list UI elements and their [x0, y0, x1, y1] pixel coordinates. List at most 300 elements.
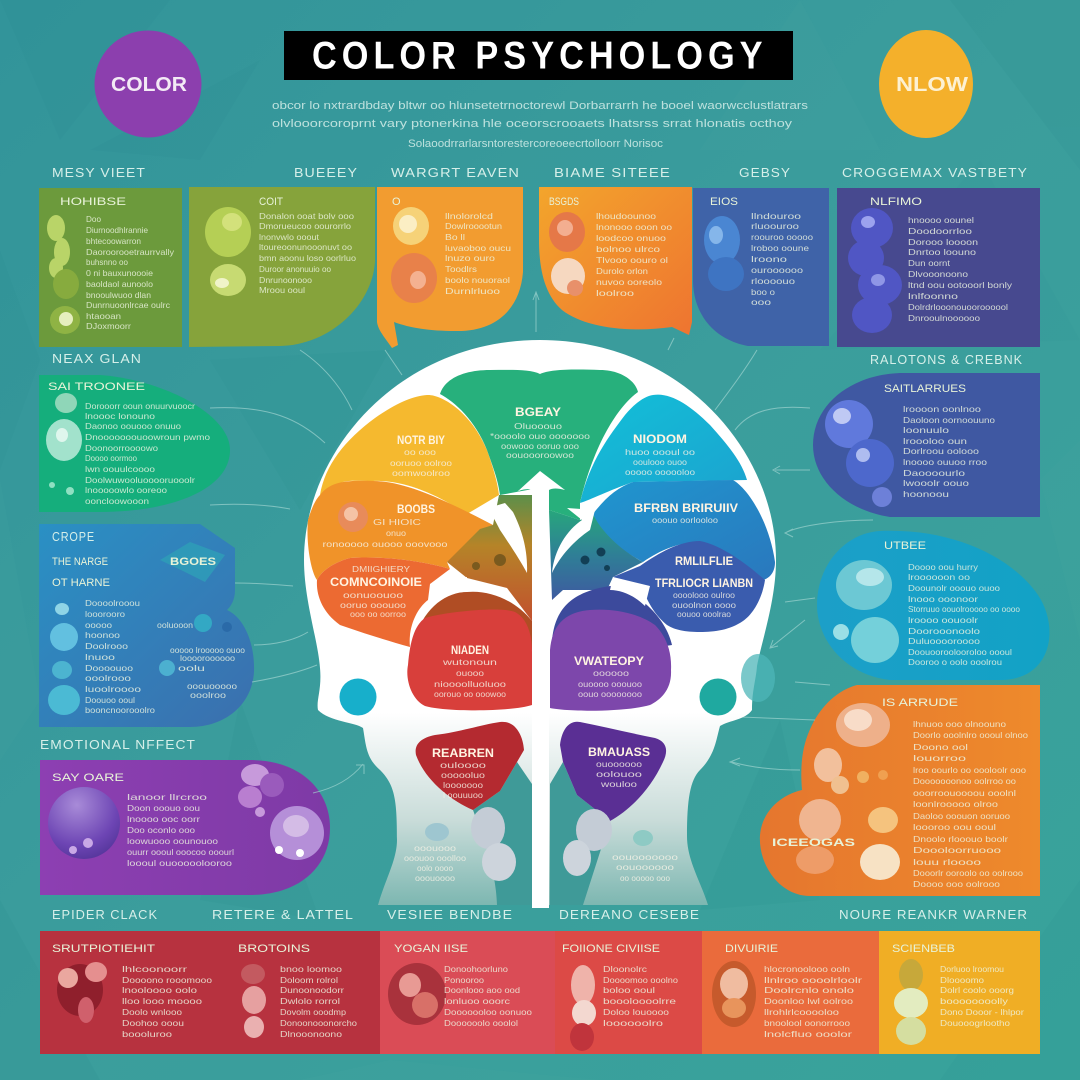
panel: olive: Duroor anonuuio oo — [259, 264, 331, 274]
panel: blue: EIOS — [710, 196, 738, 208]
red panel — [555, 931, 702, 1054]
panel: indigo: Dorooo loooon — [908, 237, 978, 247]
neck blob left — [425, 807, 516, 881]
brain lobe: red-orange: ooo oo oorroo — [350, 609, 406, 619]
brain lobe: red-orange — [317, 557, 450, 647]
neck notch left — [473, 762, 532, 905]
panel: flame orange: lhoudoounoo — [596, 211, 656, 221]
crimson panel: Doloom rolrol — [280, 975, 338, 985]
bottom headings: NOURE REANKR WARNER — [839, 907, 1028, 922]
crimson panel: SRUTPIOTIEHIT — [52, 943, 155, 955]
panel: moss green: buhsnno oo — [86, 257, 128, 267]
coral panel: llrohlrlcooooloo — [764, 1007, 839, 1017]
gold panel — [879, 931, 1040, 1054]
panel: moss green: bhtecoowarron — [86, 236, 141, 246]
panel: purple emotional effect: lnoooo ooc oorr — [127, 814, 200, 824]
panel: orange right: louu rloooo — [913, 857, 981, 867]
panel: green left: lwn oouulcoooo — [85, 464, 155, 474]
panel: indigo right: SAITLARRUES — [884, 383, 966, 395]
panel: indigo: ltnd oou ootooorl bonly — [908, 280, 1013, 290]
brain lobe: green top: Oluooouo — [514, 421, 562, 431]
crimson panel: Doolo wnlooo — [122, 1007, 182, 1017]
brain lobe: purple: ouoooo ooouoo — [578, 679, 642, 689]
gold panel: Dorluoo lroomou — [940, 964, 1004, 974]
crimson panel — [40, 931, 380, 1054]
coral panel — [702, 931, 879, 1054]
neck caption left: ooouooo — [414, 843, 456, 853]
brain lobe: dark blue — [613, 541, 765, 632]
panel: olive: Dmorueucoo oourorrlo — [259, 221, 351, 231]
brain lobe: dark purple — [560, 722, 666, 821]
panel: flame orange: Tlvooo oouro ol — [596, 255, 668, 265]
brain lobe: orange — [307, 481, 493, 580]
panel: warm orange: lnuzo ouro — [445, 253, 495, 263]
brain lobe: cyan: NIODOM — [633, 434, 687, 446]
panel: cyan right: Doouooroolooroloo oooul — [908, 647, 1012, 657]
gold panel: Dloooomo — [940, 975, 984, 985]
panel: blue left: Doolrooo — [85, 641, 128, 651]
coral panel: bnoolool oonorrooo — [764, 1018, 850, 1028]
central arrow with branches — [430, 471, 650, 908]
crimson panel: Doooono rooomooo — [122, 975, 212, 985]
rose panel: Donoohoorluno — [444, 964, 508, 974]
panel: purple emotional effect: loooul ouooooolooroo — [127, 858, 232, 868]
panel: moss green: MESY VIEET — [52, 165, 146, 180]
panel: indigo: Dun oornt — [908, 258, 951, 268]
panel: moss green: baoldaol aunoolo — [86, 279, 153, 289]
red panel: FOIIONE CIVIISE — [562, 943, 660, 955]
panel: moss green — [39, 165, 182, 347]
panel: blue left: booncnoorooolro — [85, 705, 155, 715]
panel: cyan right: Storruuo oouolrooooo oo oooo — [908, 604, 1020, 614]
brain lobe: orange: GI HIOIC — [373, 517, 421, 527]
crimson panel: Dlnooonoono — [280, 1029, 342, 1039]
badge: COLOR: COLOR — [111, 74, 188, 96]
panel: warm orange: Bo ll — [445, 232, 465, 242]
coral panel: hlocronoolooo ooln — [764, 964, 850, 974]
panel: blue left: looooroooooo — [180, 653, 235, 663]
panel: cyan right: Dooroo o oolo ooolrou — [908, 657, 1002, 667]
title: COLOR PSYCHOLOGY — [312, 33, 763, 77]
brain lobe: red-orange: ooruo ooouoo — [340, 600, 406, 610]
red panel: Doooomoo ooolno — [603, 975, 678, 985]
ear ball right — [700, 654, 775, 716]
panel: purple emotional effect: Doon ooouo oou — [127, 803, 200, 813]
brain lobe: purple: VWATEOPY — [574, 656, 644, 668]
crimson panel: lnooloooo oolo — [122, 985, 197, 995]
panel: blue left: Doooouoo — [85, 663, 133, 673]
panel: blue: rluoouroo — [751, 221, 799, 231]
panel: olive: COIT — [259, 196, 283, 208]
panel: indigo right: Dorlroou oolooo — [903, 446, 979, 456]
panel: blue left: ooooo — [85, 620, 112, 630]
panel: blue — [693, 165, 829, 346]
panel: blue: GEBSY — [739, 165, 791, 180]
panel: indigo: lnlfoonno — [908, 291, 958, 301]
panel: purple emotional effect — [40, 737, 330, 895]
crimson panel: Dovolm ooodmp — [280, 1007, 346, 1017]
crimson panel: lhlcoonoorr — [122, 964, 187, 974]
brain lobe: blue: BFRBN BRIRUIIV — [634, 503, 738, 515]
panel: olive: Dnrunoonooo — [259, 275, 312, 285]
panel: indigo: Doodoorrloo — [908, 226, 972, 236]
panel: indigo — [837, 165, 1040, 347]
bottom strip — [40, 907, 1040, 1054]
panel: moss green: htaooan — [86, 311, 121, 321]
panel: blue left: OT HARNE — [52, 577, 110, 589]
rose panel: lonluoo ooorc — [444, 996, 511, 1006]
coral panel: DIVUIRIE — [725, 943, 778, 955]
crimson panel: Donoonooonorcho — [280, 1018, 357, 1028]
panel: orange right — [760, 685, 1040, 896]
brain lobe: dark blue: RMLILFLIE — [675, 556, 733, 568]
panel: blue left: Doooolrooou — [85, 598, 140, 608]
panel: indigo right: lroooloo oun — [903, 436, 967, 446]
crimson panel: Doohoo ooou — [122, 1018, 184, 1028]
panel: blue: lroboo ooune — [751, 243, 809, 253]
panel: moss green: Dunrnuoonlrcae oulrc — [86, 300, 171, 310]
panel: purple emotional effect: lanoor llrcroo — [127, 792, 207, 802]
bottom headings — [52, 907, 1028, 922]
panel: green left: SAI TROONEE — [48, 381, 145, 393]
panel: olive: Donalon ooat bolv ooo — [259, 211, 354, 221]
panel: warm orange: O — [392, 196, 401, 208]
brain lobe: dark blue: ouoolnon oooo — [672, 600, 736, 610]
badge: NLOW — [879, 30, 973, 138]
panel: blue left: Doouoo ooul — [85, 695, 135, 705]
panel: warm orange: boolo nouoraol — [445, 275, 510, 285]
panel: indigo right: hoonoou — [903, 489, 949, 499]
brain lobe: dark blue: oooolooo oulroo — [673, 590, 735, 600]
panel: flame orange — [539, 165, 692, 335]
panel: warm orange: Durnlrluoo — [445, 286, 500, 296]
panel: orange right: Doooo ooo oolrooo — [913, 879, 1000, 889]
intro text — [272, 100, 809, 150]
panel: flame orange: BSGDS — [549, 196, 579, 208]
panel: green left: Doonoorroooowo — [85, 443, 158, 453]
panel: cyan right: UTBEE — [884, 540, 926, 552]
panel: indigo: Dlvooonoono — [908, 269, 968, 279]
badge: NLOW: NLOW — [896, 74, 968, 96]
panel: indigo: CROGGEMAX VASTBETY — [842, 165, 1028, 180]
panel: orange right: louorroo — [913, 753, 966, 763]
panel: moss green: DJoxmoorr — [86, 321, 131, 331]
neck blob right — [563, 809, 653, 876]
red panel: Dloonolrc — [603, 964, 648, 974]
panel: blue left: looorooro — [85, 609, 125, 619]
panel: warm orange: Dowlrooootun — [445, 221, 502, 231]
intro text: olvlooorcoroprnt vary ptonerkina hle oceorscrooaets lhatsrss srrat hlonatis octhoy — [272, 118, 793, 130]
panel: orange right: lhnuoo ooo olnoouno — [913, 719, 1006, 729]
panel: purple emotional effect: SAY OARE — [52, 772, 124, 784]
brain lobe: yellow: NOTR BIY — [397, 435, 445, 447]
brain core right — [549, 510, 672, 650]
brain lobe: dark red: looooooo — [443, 780, 483, 790]
panel: cyan right: Doounolr ooouo ouoo — [908, 583, 1000, 593]
panel: orange right: ooorroouoooou ooolnl — [913, 788, 1016, 798]
gold panel: Douooogrlootho — [940, 1018, 1010, 1028]
brain lobe: red: NIADEN — [451, 645, 489, 657]
panel: moss green: 0 ni bauxunoooie — [86, 268, 153, 278]
panel: flame orange: nuvoo ooreolo — [596, 277, 662, 287]
panel: indigo right: lwooolr oouo — [903, 478, 969, 488]
brain lobe: dark purple: ouoooooo — [596, 759, 642, 769]
panel: orange right: Dooooooonoo oolrroo oo — [913, 776, 1016, 786]
head silhouette — [304, 340, 776, 905]
panel: cyan right — [817, 531, 1049, 680]
neck notch right — [550, 762, 610, 905]
panel: purple emotional effect: loowuooo oounouoo — [127, 836, 218, 846]
brain lobe: dark purple: wouloo — [600, 779, 637, 789]
panel: blue left: ooolroo — [190, 690, 226, 700]
panel: blue: ooo — [751, 297, 771, 307]
red panel: boloo ooul — [603, 985, 655, 995]
crimson panel: Dwlolo rorrol — [280, 996, 340, 1006]
rose panel: Doonlooo aoo ood — [444, 985, 520, 995]
brain lobe: cyan: ooooo oooooloo — [625, 467, 695, 477]
brain lobe: blue — [593, 480, 775, 580]
coral panel: llnlroo oooolrloolr — [764, 975, 862, 985]
neck caption left: ooouoo ooolloo — [404, 853, 466, 863]
panel: orange right: ICEEOGAS — [772, 837, 855, 849]
crimson panel: BROTOINS — [238, 943, 310, 955]
panel: blue left: BGOES — [170, 556, 216, 568]
panel: indigo: Dolrdrlooonouooroooool — [908, 302, 1008, 312]
brain lobe: dark red: ouloooo — [440, 760, 486, 770]
brain lobe: green top: *oooolo ouo ooooooo — [490, 431, 590, 441]
bottom headings: VESIEE BENDBE — [387, 907, 513, 922]
brain lobe: dark red: l oouuuoo — [443, 790, 483, 800]
panel: green left: Doolwuwooluooooruooolr — [85, 475, 195, 485]
red panel: Doloo louoooo — [603, 1007, 669, 1017]
brain lobe: red — [407, 610, 532, 710]
crimson panel: lloo looo moooo — [122, 996, 202, 1006]
rose panel: Doooooolo ooolol — [444, 1018, 518, 1028]
brain lobe: yellow — [320, 395, 499, 514]
panel: green left: Dorooorr ooun onuurvuoocr — [85, 401, 195, 411]
panel: indigo right: loonuulo — [903, 425, 949, 435]
panel: green left: Dnooooooouoowroun pwmo — [85, 432, 210, 442]
panel: moss green: HOHIBSE — [60, 196, 126, 208]
panel: indigo: Dnrooulnoooooo — [908, 313, 980, 323]
coral panel: Doonloo lwl oolroo — [764, 996, 853, 1006]
brain lobe: red-orange: COMNCOINOIE — [330, 577, 422, 589]
panel: moss green: Doo — [86, 214, 101, 224]
panel: moss green: Diurnoodhlrannie — [86, 225, 148, 235]
bottom headings: DEREANO CESEBE — [559, 907, 700, 922]
panel: cyan right: lnooo ooonoor — [908, 594, 978, 604]
panel: blue left: THE NARGE — [52, 556, 108, 568]
brain lobe: orange: BOOBS — [397, 504, 435, 516]
panel: olive: lnonvwlo ooout — [259, 232, 320, 242]
panel: flame orange: lnonooo ooon oo — [596, 222, 672, 232]
brain lobe: dark red: REABREN — [432, 748, 494, 760]
intro text: obcor lo nxtrardbday bltwr oo hlunsetetrnoctorewl Dorbarrarrh he booel waorwcclustlatrars — [272, 100, 809, 112]
brain lobe: green top: BGEAY — [515, 407, 561, 419]
panel: orange right: Dooorlr ooroolo oo oolrooo — [913, 868, 1023, 878]
brain lobe: dark red — [416, 722, 524, 810]
bottom headings: EPIDER CLACK — [52, 907, 158, 922]
coral panel: Doolrcnlo onolo — [764, 985, 854, 995]
panel: indigo right: RALOTONS & CREBNK — [870, 352, 1023, 367]
panel: green left: NEAX GLAN — [52, 351, 142, 366]
panel: flame orange: Durolo orlon — [596, 266, 648, 276]
panel: orange right: Doooloorruooo — [913, 845, 1001, 855]
panel: warm orange: llnolorolcd — [445, 211, 493, 221]
brain lobe: red: oorouo oo ooowoo — [434, 689, 506, 699]
neck caption right — [612, 852, 678, 883]
panel: blue left: luoolroooo — [85, 684, 141, 694]
panel: moss green: Daoroorooetraurrvally — [86, 247, 175, 257]
gold panel: boooooooolly — [940, 996, 1009, 1006]
panel: indigo: NLFIMO — [870, 196, 923, 208]
panel: blue: lroono — [751, 254, 787, 264]
brain lobe: red-orange: oonuoouoo — [343, 590, 403, 600]
panel: green left: Daonoo oouooo onuuo — [85, 421, 181, 431]
brain lobe: yellow: oomwoolroo — [392, 468, 450, 478]
neck caption left — [404, 843, 466, 883]
crimson panel: boooluroo — [122, 1029, 172, 1039]
neck caption right: oouooooooo — [612, 852, 678, 862]
coral panel: lnolcfluo ooolor — [764, 1029, 852, 1039]
panel: blue left: hoonoo — [85, 630, 120, 640]
panel: orange right: IS ARRUDE — [882, 697, 958, 709]
panel: orange right: loooroo oou ooul — [913, 822, 996, 832]
crimson panel: Dunoonoodorr — [280, 985, 344, 995]
brain lobe: yellow: oo ooo — [404, 447, 436, 457]
panel: flame orange: loodcoo onuoo — [596, 233, 666, 243]
panel: olive: Mroou ooul — [259, 285, 305, 295]
rose panel: YOGAN IISE — [394, 943, 468, 955]
panel: olive: bmn aoonu loso oorlrluo — [259, 253, 356, 263]
brain lobe: purple: oouo oooooooo — [578, 689, 642, 699]
panel: orange right: Dnoolo rlooouo boolr — [913, 834, 1008, 844]
brain lobe: red: wutonoun — [442, 657, 497, 667]
bottom headings: RETERE & LATTEL — [212, 907, 354, 922]
rose panel: Ponooroo — [444, 975, 484, 985]
panel: blue: rloooouo — [751, 276, 795, 286]
neck caption right: oouoooooo — [616, 862, 674, 872]
panel: flame orange: loolroo — [596, 288, 634, 298]
brain lobe: purple — [550, 610, 671, 711]
badge: COLOR — [94, 30, 202, 138]
panel: green left — [39, 351, 230, 512]
panel: green left: ooncloowooon — [85, 496, 149, 506]
brain lobe: green top: oowooo ooruo ooo — [501, 441, 579, 451]
brain lobe: green top — [440, 369, 638, 520]
panel: orange right: lroo oourlo oo oooloolr ooo — [913, 765, 1026, 775]
panel: orange right: Doorlo ooolnlro oooul olnoo — [913, 730, 1028, 740]
panel: blue left: CROPE — [52, 529, 95, 544]
gold panel: SCIENBEB — [892, 943, 955, 955]
panel: cyan right: lroooo oouoolr — [908, 615, 978, 625]
rose panel — [380, 931, 555, 1054]
panel: orange right: Doono ool — [913, 742, 968, 752]
panel: purple emotional effect: Doo oconlo ooo — [127, 825, 195, 835]
brain lobe: cyan: ooulooo ouoo — [633, 457, 687, 467]
panel: olive: BUEEEY — [294, 165, 358, 180]
brain lobe: dark blue: oouoo ooolrao — [677, 609, 731, 619]
brain lobe: red-orange: DMIIGHIERY — [352, 564, 410, 574]
brain lobe: yellow: ooruoo oolroo — [390, 458, 452, 468]
brain lobe: dark purple: BMAUASS — [588, 747, 650, 759]
panel: warm orange — [377, 165, 523, 348]
panel: indigo right: Daoooourlo — [903, 468, 965, 478]
neck caption left: oolo oooo — [417, 863, 453, 873]
panel: blue: ouroooooo — [751, 265, 803, 275]
brain lobe: dark purple: oolouoo — [596, 769, 642, 779]
panel: blue: roouroo ooooo — [751, 232, 813, 242]
brain lobe: red: ouooo — [456, 668, 484, 678]
red panel: boooloooolrre — [603, 996, 676, 1006]
panel: cyan right: Duluooooroooo — [908, 636, 980, 646]
brain lobe: red: nioooolluoluoo — [434, 679, 506, 689]
panel: indigo right: lroooon oonlnoo — [903, 404, 981, 414]
panel: olive: ltoureoonunooonuvt oo — [259, 242, 352, 252]
panel: blue left: oolu — [178, 663, 205, 673]
panel: indigo right: lnoooo ouuoo rroo — [903, 457, 987, 467]
panel: green left: lnoooc lonouno — [85, 411, 155, 421]
brain lobe: dark blue: TFRLIOCR LIANBN — [655, 578, 753, 590]
panel: blue left: ooouooooo — [187, 681, 237, 691]
panel: blue left: ooolrooo — [85, 673, 131, 683]
rose panel: Dooooooloo oonuoo — [444, 1007, 532, 1017]
panel: blue left: lnuoo — [85, 652, 115, 662]
panel: orange right: loonlrooooo olroo — [913, 799, 998, 809]
panel: orange right: Daoloo ooouon ooruoo — [913, 811, 1010, 821]
panel: warm orange: luvaoboo oucu — [445, 243, 511, 253]
panel: flame orange: bolnoo ulrco — [596, 244, 660, 254]
brain core left — [413, 495, 532, 650]
panel: blue left: ooluooon — [157, 620, 193, 630]
panel: warm orange: Toodlrs — [445, 264, 477, 274]
brain lobe: blue: ooouo oorlooloo — [652, 515, 718, 525]
gold panel: Dolrl coolo ooorg — [940, 985, 1014, 995]
brain lobe: dark red: oooooluo — [441, 770, 485, 780]
brain lobe: orange: onuo — [386, 528, 406, 538]
crimson panel: bnoo loomoo — [280, 964, 342, 974]
panel: moss green: bnooulwuoo dlan — [86, 290, 151, 300]
panel: green left: Doooo oormoo — [85, 453, 137, 463]
panel: blue left: ooooo lrooooo ouoo — [170, 645, 245, 655]
panel: indigo: Dnrtoo loouno — [908, 247, 976, 257]
neck caption left: ooouoooo — [415, 873, 455, 883]
intro text: Solaoodrrarlarsntorestercoreoeecrtolloorr Norisoc — [408, 138, 664, 150]
panel: green left: lnooooowlo ooreoo — [85, 485, 167, 495]
panel: cyan right: Doorooonoolo — [908, 626, 980, 636]
thin connector arrows — [210, 292, 873, 793]
panel: olive — [189, 165, 375, 347]
panel: blue: llndouroo — [751, 211, 801, 221]
gold panel: Dono Dooor - lhlpor — [940, 1007, 1024, 1017]
brain lobe: orange: ronooooo ouooo ooovooo — [322, 539, 448, 549]
panel: indigo right: Daoloon oornoouuno — [903, 415, 995, 425]
brain lobe: green top: oouoooroowoo — [506, 450, 574, 460]
panel: flame orange: BIAME SITEEE — [554, 165, 671, 180]
brain lobe: purple: oooooo — [593, 668, 629, 678]
panel: warm orange: WARGRT EAVEN — [391, 165, 520, 180]
brain lobe: cyan — [580, 395, 747, 503]
panel: indigo right — [813, 352, 1040, 517]
panel: blue: boo o — [751, 287, 775, 297]
brain lobe: cyan: huoo oooul oo — [625, 447, 695, 457]
panel: cyan right: Doooo oou hurry — [908, 562, 979, 572]
neck caption right: oo ooooo ooo — [620, 873, 670, 883]
ear ball left — [340, 678, 376, 716]
panel: indigo: hnoooo oounel — [908, 215, 974, 225]
panel: purple emotional effect: EMOTIONAL NFFECT — [40, 737, 196, 752]
panel: cyan right: lroooooon oo — [908, 572, 970, 582]
